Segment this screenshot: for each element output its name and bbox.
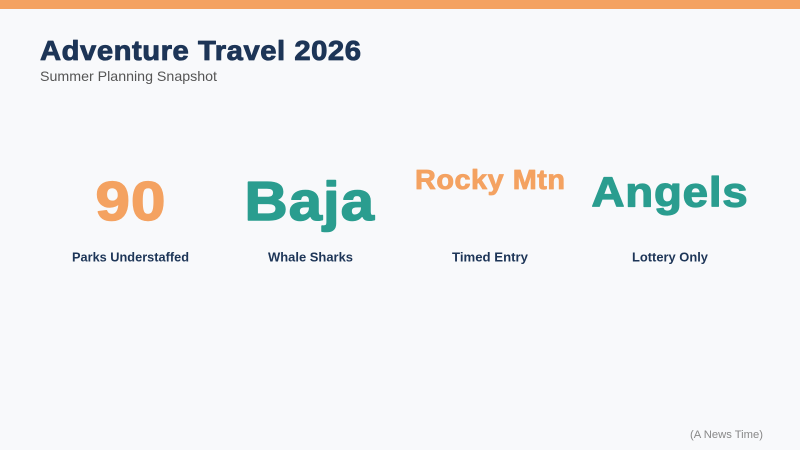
label: lottery only: Lottery Only (632, 250, 709, 264)
label: timed entry: Timed Entry (452, 250, 529, 264)
stat: parks understaffed (72, 170, 189, 264)
value: Angels: Angels (592, 169, 748, 216)
stat: whale sharks (244, 170, 375, 264)
top accent bar (0, 0, 800, 9)
stat: timed entry (415, 164, 566, 264)
value: 90: 90 (96, 170, 166, 232)
label: whale sharks: Whale Sharks (268, 250, 353, 264)
value: Rocky Mtn: Rocky Mtn (415, 164, 566, 195)
label: parks understaffed: Parks Understaffed (72, 250, 189, 264)
stat: lottery only (592, 169, 748, 264)
value: Baja: Baja (244, 170, 375, 232)
subtitle: Summer Planning Snapshot (40, 68, 217, 84)
title: Adventure Travel 2026 (40, 35, 362, 66)
source note: (A News Time) (690, 429, 763, 441)
